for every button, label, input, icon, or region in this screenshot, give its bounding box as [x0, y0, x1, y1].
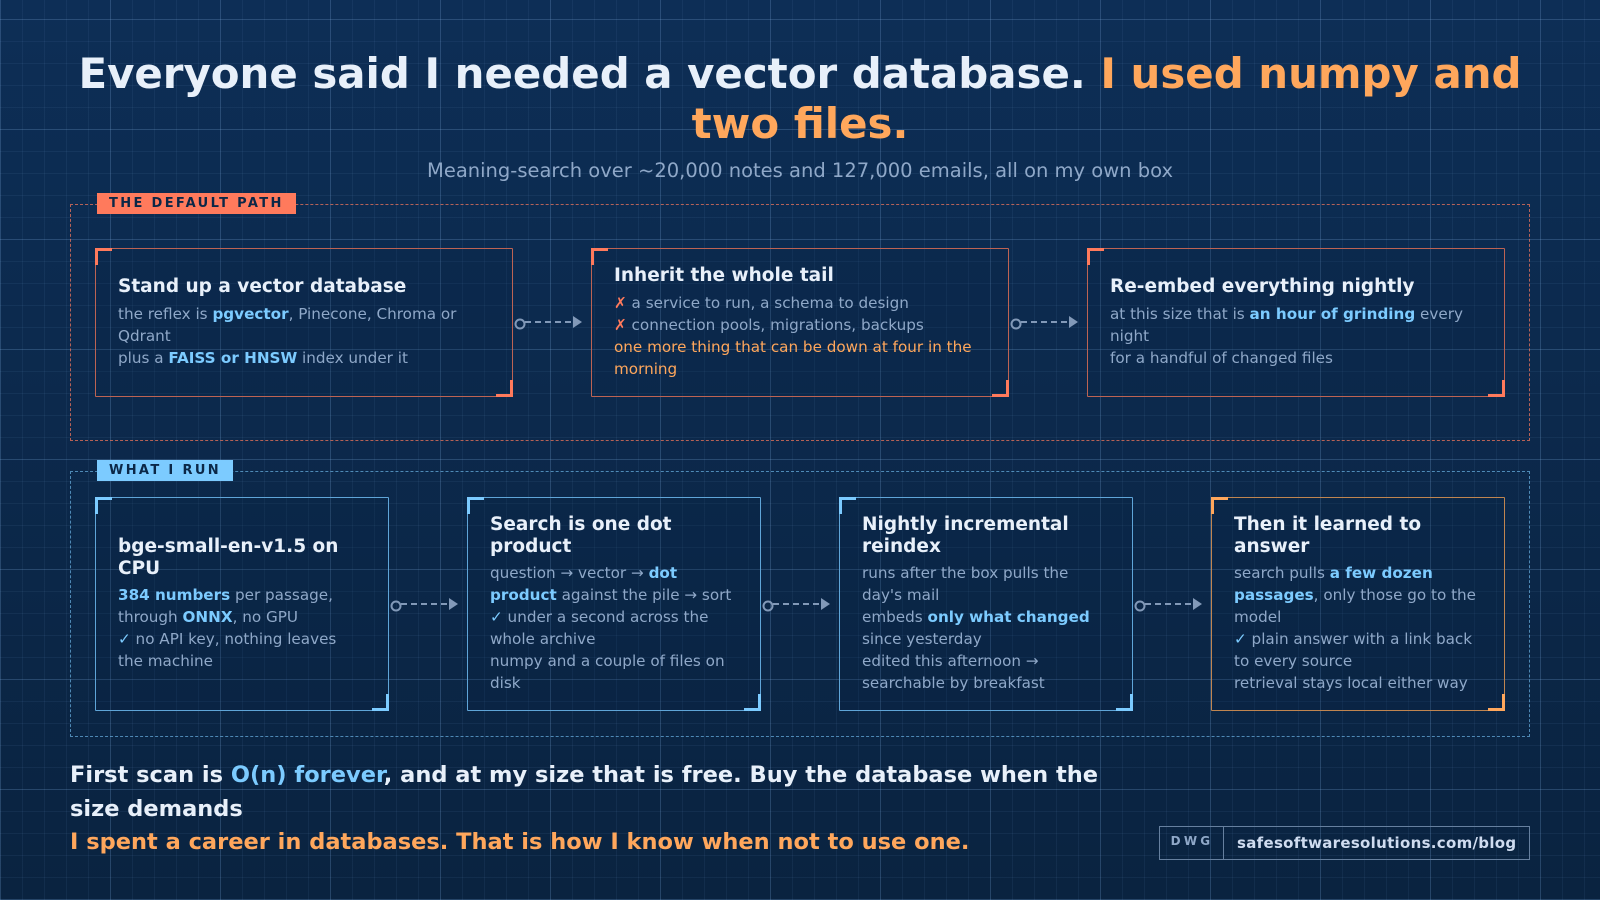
closing statement: First scan is O(n) forever, and at my size that is free. Buy the database when the: [70, 762, 1098, 788]
card: nightly incremental reindex: embeds only what changed: [862, 608, 1090, 626]
stamp label: DWG: [1160, 827, 1224, 859]
card: re-embed everything nightly: [1087, 248, 1505, 397]
card: inherit the whole tail: one more thing that can be down at four in the: [614, 338, 972, 356]
arrow: embed to search: [390, 598, 458, 612]
card: bge-small: the machine: [118, 652, 213, 670]
card: re-embed everything nightly: Re-embed everything nightly: [1110, 276, 1414, 297]
card: then it learned to answer: passages, only those go to the: [1234, 586, 1476, 604]
card: search is one dot product: ✓ under a second across the: [490, 608, 708, 626]
card: stand up a vector database: [95, 248, 513, 397]
card: nightly incremental reindex: day's mail: [862, 586, 939, 604]
card: nightly incremental reindex: runs after the box pulls the: [862, 564, 1068, 582]
title: Everyone said I needed a vector database. I used numpy and: [78, 49, 1522, 98]
tag: the default path: THE DEFAULT PATH: [109, 196, 284, 211]
card: search is one dot product: Search is one dot: [490, 514, 672, 535]
card: bge-small: 384 numbers per passage,: [118, 586, 333, 604]
subtitle: Meaning-search over ~20,000 notes and 127,000 emails, all on my own box: [427, 159, 1173, 182]
card: bge-small: [95, 497, 389, 711]
panel: what I run: [70, 471, 1530, 737]
title: two files.: [692, 99, 908, 148]
arrow: reindex to answer: [1134, 598, 1202, 612]
card: search is one dot product: [467, 497, 761, 711]
card: nightly incremental reindex: reindex: [862, 536, 941, 556]
tag: what I run: [97, 460, 233, 481]
stamp label: DWG: DWG: [1171, 834, 1213, 848]
tag: what I run: WHAT I RUN: [109, 463, 221, 478]
tag: the default path: [97, 193, 296, 214]
card: search is one dot product: numpy and a couple of files on: [490, 652, 725, 670]
card: nightly incremental reindex: [839, 497, 1133, 711]
panel: the default path: [70, 204, 1530, 441]
card: nightly incremental reindex: edited this afternoon →: [862, 652, 1039, 670]
card: re-embed everything nightly: night: [1110, 327, 1149, 345]
title: [78, 49, 1522, 148]
stamp url: safesoftwaresolutions.com/blog: [1237, 834, 1516, 852]
card: then it learned to answer: ✓ plain answer with a link back: [1234, 630, 1472, 648]
card: search is one dot product: disk: [490, 674, 521, 692]
card: inherit the whole tail: [591, 248, 1009, 397]
card: stand up a vector database: Stand up a vector database: [118, 276, 406, 297]
card: then it learned to answer: to every source: [1234, 652, 1352, 670]
card: stand up a vector database: plus a FAISS or HNSW index under it: [118, 349, 408, 367]
card: re-embed everything nightly: for a handful of changed files: [1110, 349, 1333, 367]
card: inherit the whole tail: ✗ a service to run, a schema to design: [614, 294, 909, 312]
card: then it learned to answer: search pulls a few dozen: [1234, 564, 1433, 582]
card: re-embed everything nightly: at this size that is an hour of grinding every: [1110, 305, 1463, 323]
card: bge-small: ✓ no API key, nothing leaves: [118, 630, 336, 648]
card: search is one dot product: question → vector → dot: [490, 564, 677, 582]
card: then it learned to answer: answer: [1234, 536, 1309, 556]
card: bge-small: bge-small-en-v1.5 on: [118, 536, 338, 557]
arrow: tail to re-embed: [1010, 316, 1078, 330]
footer stamp: [1159, 826, 1530, 860]
arrow: database to tail: [514, 316, 582, 330]
card: bge-small: through ONNX, no GPU: [118, 608, 298, 626]
card: then it learned to answer: [1211, 497, 1505, 711]
closing statement: [70, 762, 1098, 855]
closing statement: I spent a career in databases. That is how I know when not to use one.: [70, 829, 969, 855]
arrow: search to reindex: [762, 598, 830, 612]
closing statement: size demands: [70, 796, 243, 822]
card: inherit the whole tail: morning: [614, 360, 677, 378]
card: search is one dot product: product: [490, 536, 571, 556]
card: then it learned to answer: retrieval stays local either way: [1234, 674, 1468, 692]
card: inherit the whole tail: Inherit the whole tail: [614, 265, 834, 286]
card: then it learned to answer: Then it learned to: [1234, 514, 1421, 535]
card: then it learned to answer: model: [1234, 608, 1281, 626]
card: bge-small: CPU: [118, 558, 160, 578]
card: search is one dot product: product against the pile → sort: [490, 586, 731, 604]
card: inherit the whole tail: ✗ connection pools, migrations, backups: [614, 316, 924, 334]
card: stand up a vector database: Qdrant: [118, 327, 171, 345]
card: nightly incremental reindex: searchable by breakfast: [862, 674, 1045, 692]
card: stand up a vector database: the reflex is pgvector, Pinecone, Chroma or: [118, 305, 456, 323]
card: nightly incremental reindex: since yesterday: [862, 630, 982, 648]
card: nightly incremental reindex: Nightly incremental: [862, 514, 1069, 535]
card: search is one dot product: whole archive: [490, 630, 595, 648]
